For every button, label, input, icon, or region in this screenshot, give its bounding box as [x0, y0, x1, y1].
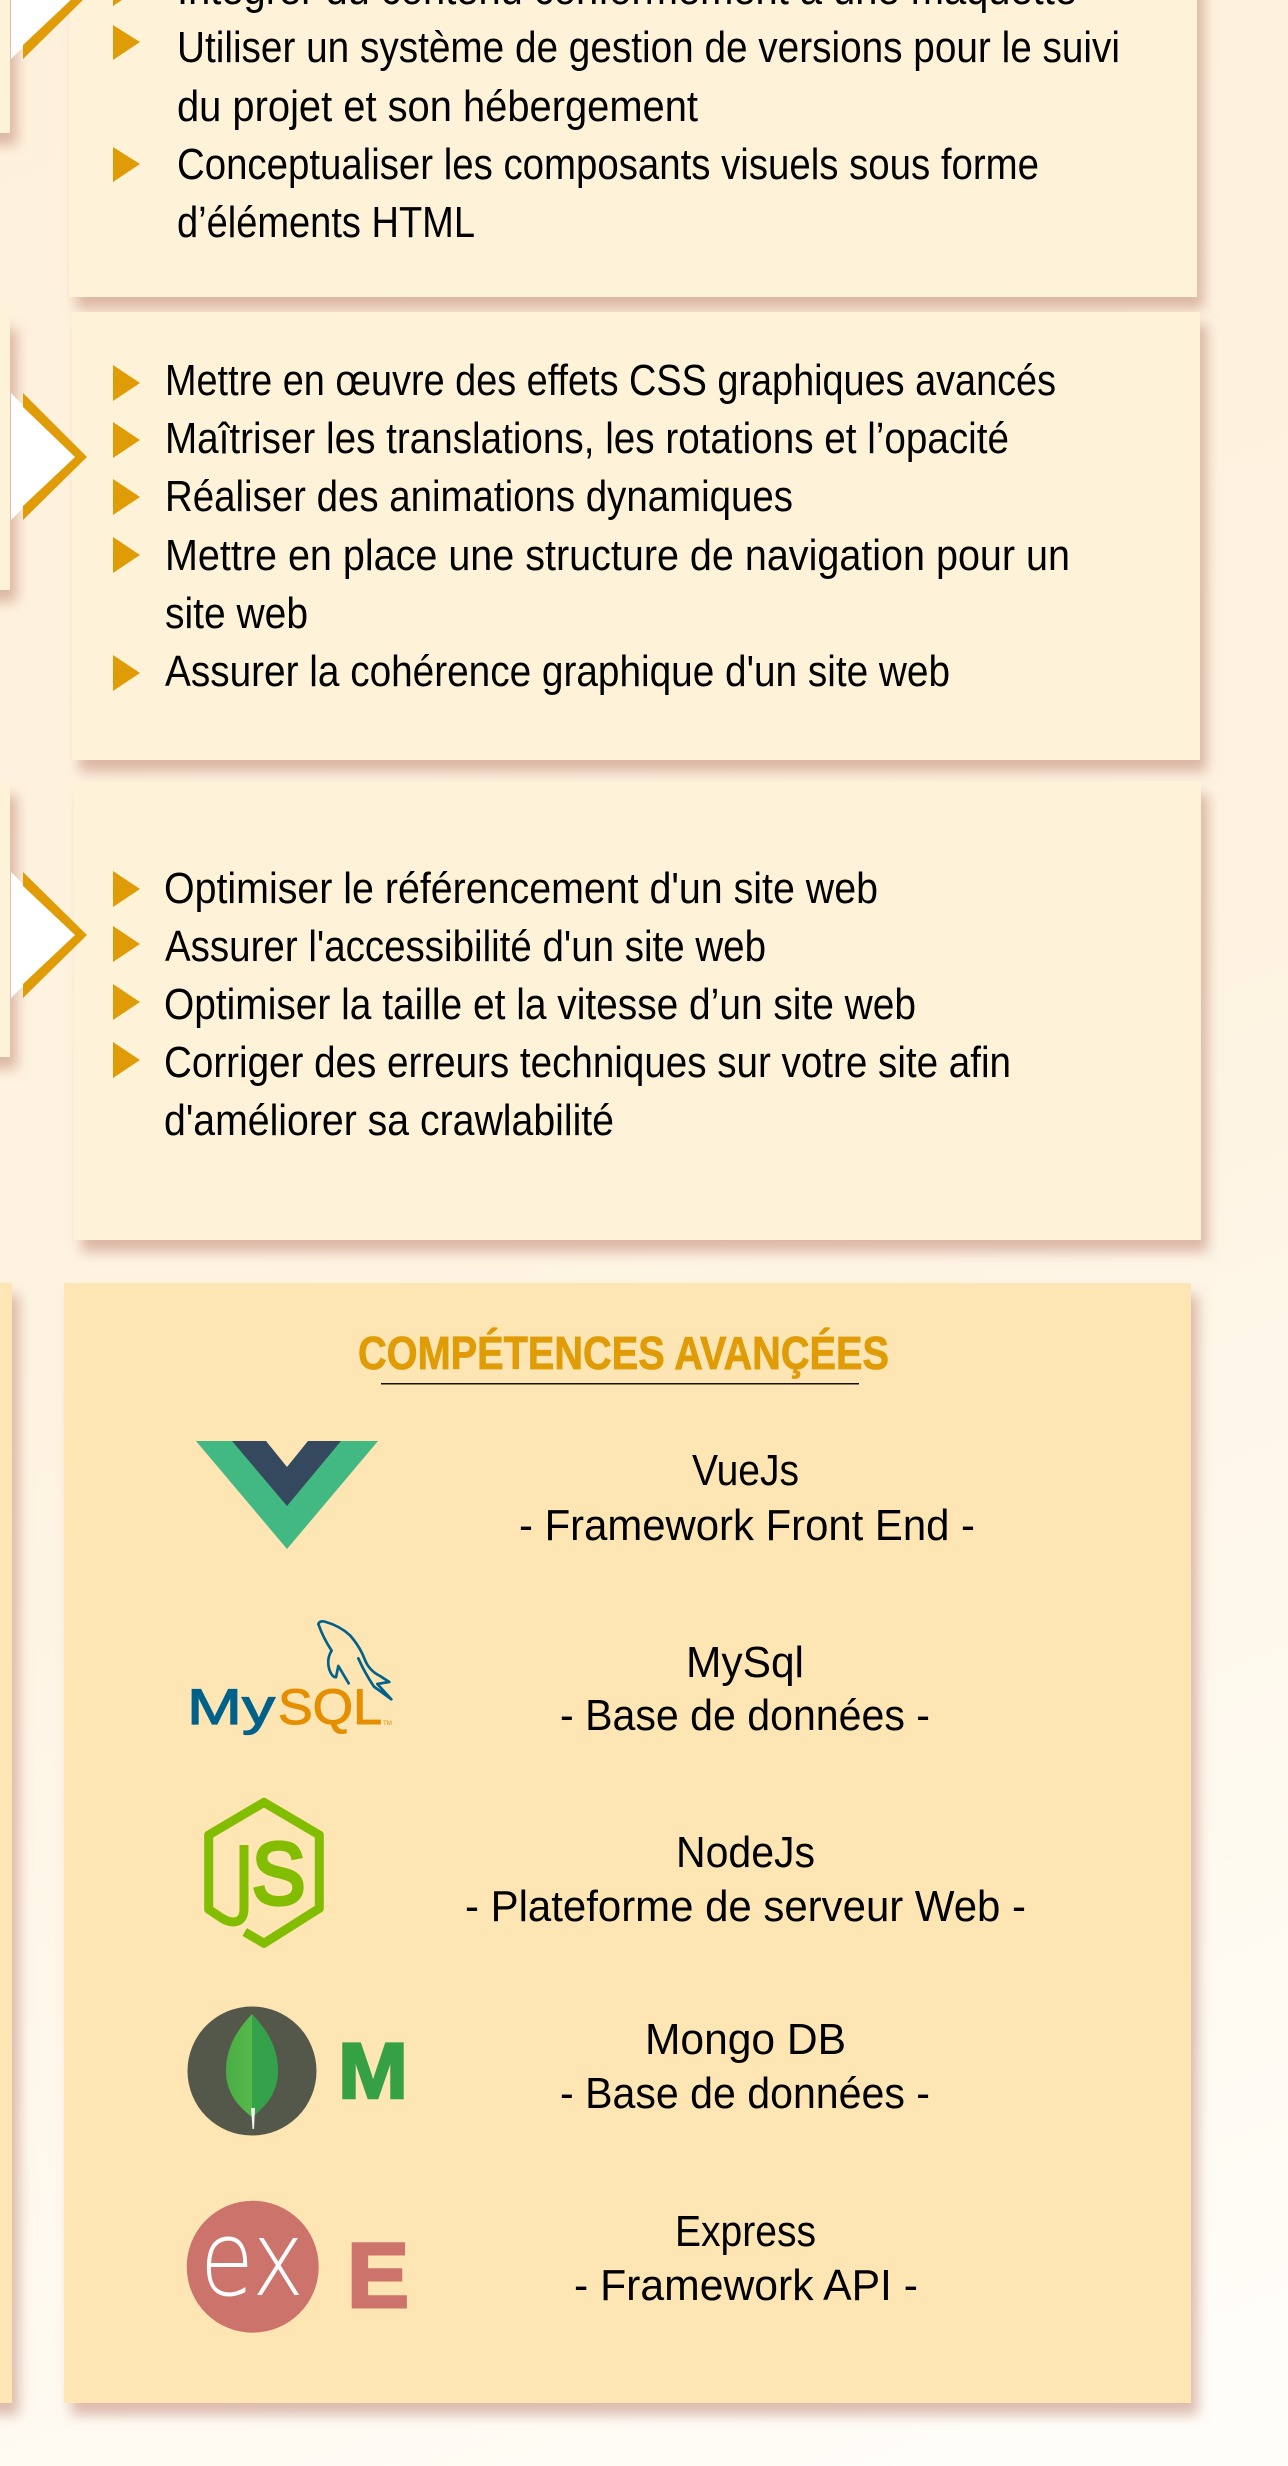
icon: Node.js logo: [209, 1802, 319, 1943]
bullet text list: [177, 0, 1120, 247]
heading: COMPÉTENCES AVANÇÉES: [358, 1327, 889, 1379]
bullet text list: Maîtriser les translations, les rotations et l’opacité: [165, 414, 1009, 463]
bullet text list: Réaliser des animations dynamiques: [165, 472, 793, 521]
arrow: chevron 3: [11, 872, 87, 998]
bullet text list: Optimiser le référencement d'un site web: [164, 864, 878, 913]
bullet text list: Corriger des erreurs techniques sur votre site afin: [164, 1038, 1011, 1087]
heading underline: [381, 1383, 859, 1384]
arrow: chevron 2: [11, 393, 87, 520]
icon: MySQL logo: [187, 1621, 392, 1735]
panel: skills list 2: [72, 312, 1200, 760]
bullet text list: Mettre en œuvre des effets CSS graphiques avancés: [165, 356, 1056, 405]
text: NodeJs: - Plateforme de serveur Web -: [465, 1882, 1026, 1931]
left panel stub 4: [0, 1283, 12, 2403]
text: Express: Express: [675, 2207, 816, 2256]
bullet text list: [164, 864, 1011, 1145]
bullet text list: Assurer la cohérence graphique d'un site web: [165, 647, 950, 696]
bullet icons: [113, 871, 140, 1078]
panel: skills list 3: [74, 782, 1201, 1240]
icon: Express logo: E: [347, 2225, 409, 2327]
bullet text list: Utiliser un système de gestion de versions pour le suivi: [177, 23, 1120, 72]
left panel stub 3: [0, 783, 10, 1057]
text: Express: [574, 2207, 918, 2310]
icon: Vue.js logo: [196, 1441, 378, 1549]
text: NodeJs: NodeJs: [676, 1828, 815, 1877]
icon: Express logo: ex: [200, 2198, 304, 2320]
icon: MongoDB logo: [188, 2006, 408, 2136]
text: MySql: - Base de données -: [560, 1691, 930, 1740]
left panel stub 1: [0, 0, 10, 133]
text: MySql: [560, 1638, 930, 1740]
left panel stub 2: [0, 317, 10, 590]
icon: Express logo: [187, 2198, 409, 2333]
icon: MySQL logo: SQL: [278, 1679, 382, 1735]
icon: dolphin: [318, 1621, 391, 1699]
bullet text list: d'améliorer sa crawlabilité: [164, 1096, 614, 1145]
bullet text list: [165, 356, 1070, 696]
bullet icons: [113, 365, 140, 691]
bullet text list: site web: [165, 589, 308, 638]
text: Mongo DB: [560, 2015, 930, 2118]
bullet text list: d’éléments HTML: [177, 198, 475, 247]
text: VueJs: VueJs: [692, 1446, 799, 1495]
panel: compétences avancées: [64, 1283, 1191, 2403]
icon: MySQL logo: My: [187, 1679, 275, 1735]
text: VueJs: [519, 1446, 975, 1550]
text: Mongo DB: - Base de données -: [560, 2069, 930, 2118]
bullet icons: [113, 0, 140, 182]
text: Express: - Framework API -: [574, 2261, 918, 2310]
bullet text list: Assurer l'accessibilité d'un site web: [165, 922, 766, 971]
text: NodeJs: [465, 1828, 1026, 1931]
text: MySql: MySql: [686, 1638, 804, 1687]
bullet text list: Optimiser la taille et la vitesse d’un site web: [164, 980, 916, 1029]
icon: MongoDB logo: M: [338, 2026, 408, 2115]
bullet text list: Conceptualiser les composants visuels sous forme: [177, 140, 1039, 189]
text: VueJs: - Framework Front End -: [519, 1501, 975, 1550]
bullet text list: Mettre en place une structure de navigation pour un: [165, 531, 1070, 580]
bullet text list: du projet et son hébergement: [177, 82, 698, 131]
text: Mongo DB: Mongo DB: [645, 2015, 846, 2064]
arrow: chevron 1: [11, 0, 87, 59]
panel: skills list 1: [69, 0, 1197, 297]
icon: MySQL logo: TM: [383, 1721, 392, 1727]
icon: Node.js logo: S: [252, 1825, 305, 1923]
